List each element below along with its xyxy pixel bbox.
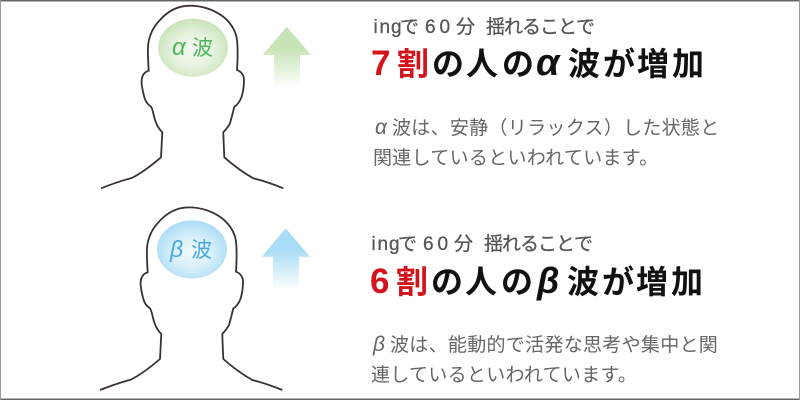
- panel: beta wave: [100, 207, 310, 390]
- alpha heading: 波が増加: [568, 46, 704, 82]
- beta wave label kanji: 波: [191, 239, 212, 262]
- alpha body text: α: [375, 116, 388, 139]
- alpha body text: 波は、安静（リラックス）した状態と: [392, 117, 720, 139]
- beta heading: 波が増加: [567, 264, 703, 300]
- alpha wave label: α: [172, 34, 187, 61]
- alpha subheading: ingで60分揺れることで: [374, 16, 595, 38]
- beta body text: 波は、能動的で活発な思考や集中と関: [390, 334, 718, 356]
- beta body text: β: [372, 333, 385, 356]
- alpha heading: 7: [371, 44, 390, 83]
- beta heading: の人の: [431, 264, 533, 300]
- beta wave label: β: [169, 236, 183, 262]
- alpha heading: α: [536, 42, 561, 84]
- beta heading: [370, 260, 703, 301]
- alpha body text: 関連しているといわれています。: [373, 147, 659, 169]
- panel: alpha text: [371, 16, 720, 169]
- alpha heading: の人の: [432, 46, 534, 82]
- icon: head silhouette beta: [100, 207, 282, 390]
- panel: beta text: [370, 233, 718, 386]
- icon: green up arrow: [263, 27, 311, 88]
- icon: blue up arrow: [262, 228, 310, 290]
- beta body text: [371, 333, 718, 386]
- beta heading: 6: [370, 262, 389, 301]
- beta heading: 割: [396, 264, 428, 300]
- alpha heading: 割: [397, 46, 429, 82]
- panel: alpha wave: [101, 6, 311, 188]
- alpha body text: [373, 116, 720, 169]
- alpha heading: [371, 42, 704, 84]
- icon: beta brain ellipse: [157, 220, 227, 278]
- icon: head silhouette alpha: [101, 6, 283, 188]
- beta subheading: ingで60分揺れることで: [372, 233, 593, 255]
- beta body text: 連しているといわれています。: [371, 364, 637, 386]
- alpha wave label kanji: 波: [192, 37, 213, 60]
- icon: alpha brain ellipse: [158, 19, 228, 77]
- beta heading: β: [536, 260, 559, 301]
